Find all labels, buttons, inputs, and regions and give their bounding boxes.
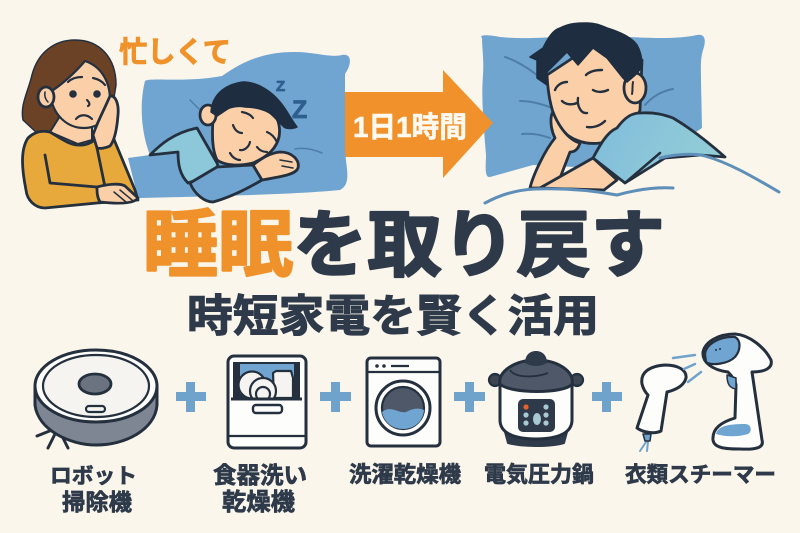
label: dishwasher dryer (213, 462, 307, 516)
arrow: 1 hour a day (345, 70, 493, 178)
icon: plus (320, 382, 351, 412)
label: robot vacuum: ロボット (50, 465, 137, 488)
icon: dishwasher (228, 356, 306, 448)
icon: washing machine (367, 358, 440, 446)
illustration: worried woman (22, 40, 138, 208)
arrow: 1 hour a day: 1日1時間 (353, 111, 467, 144)
label: robot vacuum: 掃除機 (62, 489, 132, 515)
icon: plus (454, 382, 485, 412)
title: を取り戻す (293, 205, 665, 286)
icon: plus (176, 382, 206, 412)
title (143, 205, 665, 286)
title: 睡眠 (143, 205, 293, 286)
icon: snore Z letters: Z (292, 96, 307, 124)
icon: garment steamers (637, 334, 771, 451)
illustration: well rested man on pillow (481, 23, 779, 203)
illustration: short sleeper man on pillow (128, 52, 350, 202)
icon: electric pressure cooker (489, 351, 583, 446)
label: washer dryer: 洗濯乾燥機 (349, 462, 461, 487)
label: dishwasher dryer: 乾燥機 (222, 489, 295, 516)
icon: plus (592, 382, 622, 412)
icon: snore Z letters: Z (276, 78, 285, 95)
label: robot vacuum (50, 465, 137, 515)
heading: busy label: 忙しくて (119, 36, 231, 69)
icon: snore Z letters (276, 78, 307, 124)
label: electric pressure cooker: 電気圧力鍋 (484, 462, 594, 487)
subtitle: 時短家電を賢く活用 (187, 292, 599, 341)
label: garment steamer: 衣類スチーマー (625, 463, 776, 487)
icon: robot vacuum (35, 350, 157, 448)
label: dishwasher dryer: 食器洗い (213, 462, 307, 488)
